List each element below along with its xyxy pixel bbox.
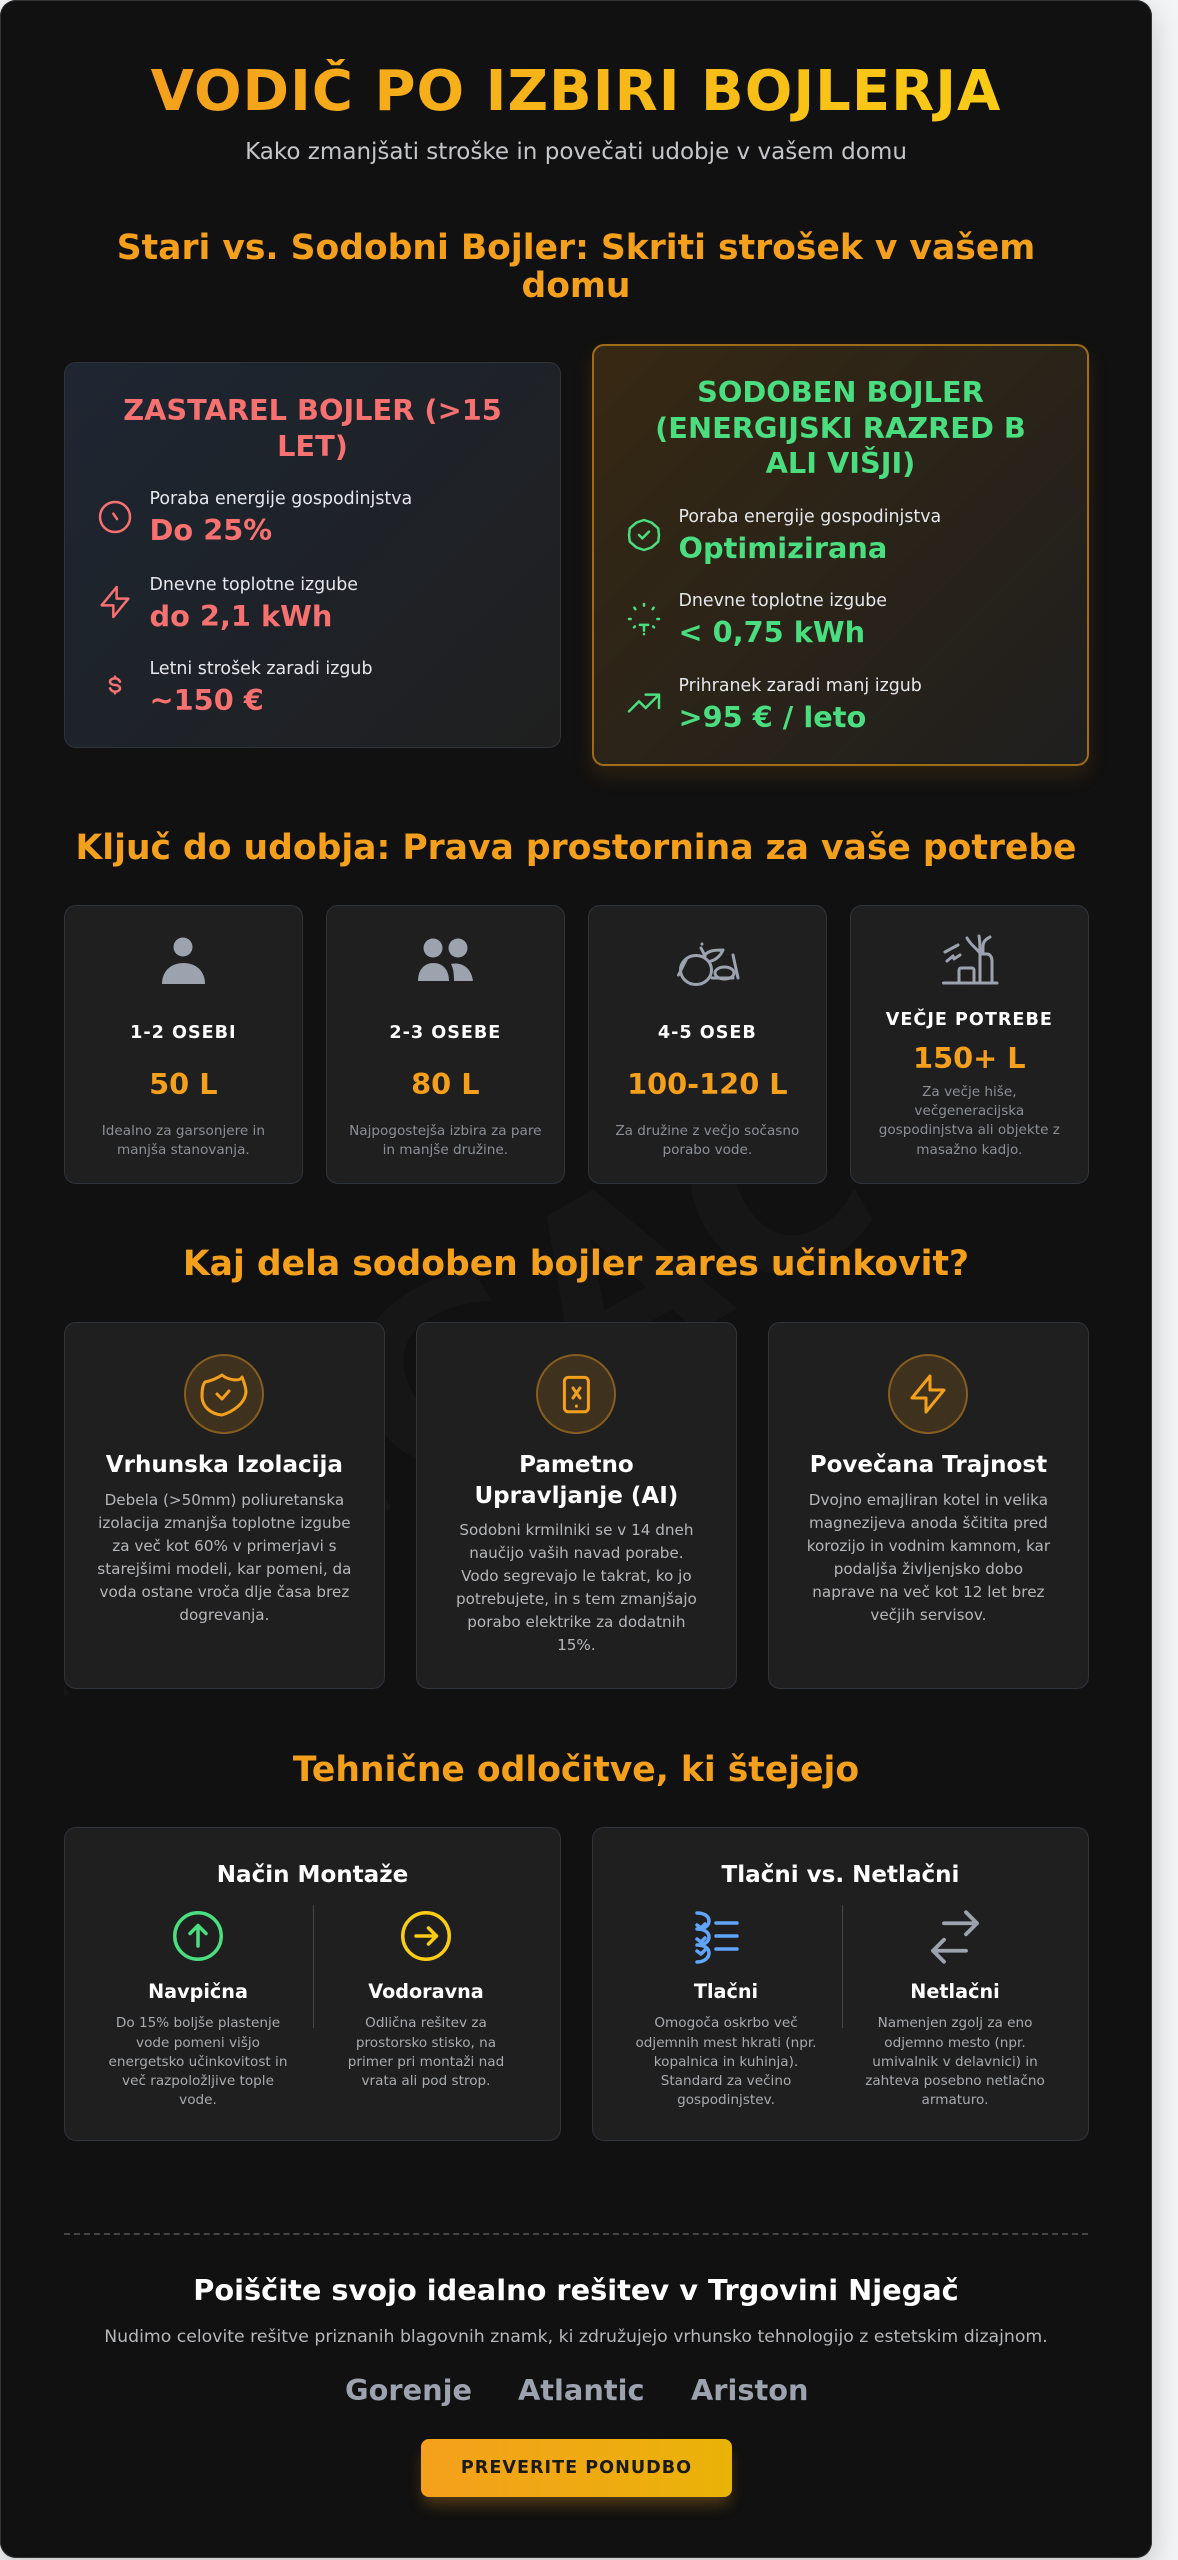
name: Netlačni — [910, 1980, 1000, 2003]
column: non-pressure — [840, 1904, 1070, 2114]
description: umivalnik v delavnici) in — [872, 2054, 1038, 2070]
description: manjša stanovanja. — [117, 1142, 250, 1158]
subtitle: Kako zmanjšati stroške in povečati udobje v vašem domu — [245, 139, 907, 165]
description — [102, 1123, 265, 1158]
label: Poraba energije gospodinjstva — [150, 489, 412, 509]
icon: two people — [418, 938, 473, 981]
description — [109, 2015, 287, 2108]
description: masažno kadjo. — [916, 1142, 1022, 1158]
label: 4-5 OSEB — [658, 1023, 757, 1043]
old boiler heading: ZASTAREL BOJLER (>15 — [123, 393, 502, 427]
heading: old vs modern — [117, 228, 1035, 306]
description: več razpoložljive tople — [122, 2073, 274, 2089]
description — [879, 1084, 1060, 1158]
icon: exchange arrows — [922, 1904, 988, 1970]
icon: trend up — [628, 693, 660, 713]
old boiler heading: LET) — [277, 429, 348, 463]
value: Optimizirana — [678, 530, 887, 564]
brand names — [0, 2372, 1152, 2408]
description: naprave na več kot 12 let brez — [812, 1582, 1045, 1600]
description: gospodinjstva ali objekte z — [879, 1122, 1060, 1138]
size card: 1-2 persons — [64, 905, 303, 1184]
label: Dnevne toplotne izgube — [678, 591, 887, 611]
label: Letni strošek zaradi izgub — [150, 659, 372, 679]
call to action text: Nudimo celovite rešitve priznanih blagovnih znamk, ki združujejo vrhunsko tehnologijo z estetskim dizajnom. — [104, 2327, 1048, 2347]
name: Vodoravna — [368, 1980, 484, 2003]
description — [456, 1520, 697, 1654]
panel: modern boiler — [592, 344, 1089, 766]
title: VODIČ PO IZBIRI BOJLERJA — [151, 59, 1001, 124]
icon badge: bolt — [888, 1354, 968, 1434]
description: energetsko učinkovitost in — [109, 2054, 287, 2070]
column: horizontal — [348, 1911, 504, 2089]
label: Prihranek zaradi manj izgub — [678, 676, 922, 696]
modern boiler heading: SODOBEN BOJLER — [697, 375, 984, 409]
heading: capacity: Ključ do udobja: Prava prostornina za vaše potrebe — [76, 828, 1076, 868]
description — [807, 1490, 1050, 1624]
icon: bolt — [910, 1374, 946, 1414]
modern boiler heading: (ENERGIJSKI RAZRED B — [655, 410, 1026, 444]
icon: arrow right circle — [401, 1911, 451, 1961]
description: gospodinjstev. — [677, 2092, 775, 2108]
metric: energy use — [98, 489, 412, 547]
icon: dollar — [108, 675, 122, 695]
description: Idealno za garsonjere in — [102, 1123, 265, 1139]
icon badge: phone — [536, 1354, 616, 1434]
description — [615, 1123, 799, 1158]
size card: 4-5 persons — [588, 905, 827, 1184]
title: Upravljanje (AI) — [474, 1483, 678, 1509]
capacity: 150+ L — [913, 1040, 1026, 1074]
column: vertical — [109, 1911, 287, 2108]
feature card: smart control — [416, 1322, 737, 1689]
icon: person — [162, 938, 205, 984]
heading: technical decisions: Tehnične odločitve, ki štejejo — [293, 1750, 859, 1790]
label: Poraba energije gospodinjstva — [678, 507, 941, 527]
label: 1-2 OSEBI — [130, 1023, 237, 1043]
description: magnezijeva anoda ščitita pred — [809, 1514, 1048, 1532]
metric: annual cost — [108, 659, 372, 717]
description: Sodobni krmilniki se v 14 dneh — [459, 1520, 693, 1538]
label: VEČJE POTREBE — [886, 1010, 1053, 1030]
icon: phone — [562, 1376, 590, 1414]
icon: arrow up circle — [173, 1911, 223, 1961]
icon: shield check — [200, 1374, 248, 1416]
metric: heat loss — [100, 574, 358, 632]
description: Vodo segrevajo le takrat, ko jo — [461, 1566, 692, 1584]
description: porabo elektrike za dodatnih — [467, 1612, 686, 1630]
description — [97, 1490, 352, 1624]
description: Dvojno emajliran kotel in velika — [809, 1490, 1048, 1508]
description: Odlična rešitev za — [365, 2015, 487, 2031]
description: armaturo. — [922, 2092, 988, 2108]
description — [349, 1123, 542, 1158]
label: Dnevne toplotne izgube — [150, 574, 358, 594]
value: < 0,75 kWh — [678, 614, 865, 648]
description: in manjše družine. — [383, 1142, 508, 1158]
capacity: 50 L — [149, 1066, 218, 1100]
description: 15%. — [557, 1636, 596, 1654]
icon: coil — [695, 1911, 739, 1964]
description: Najpogostejša izbira za pare — [349, 1123, 542, 1139]
description: starejšimi modeli, kar pomeni, da — [97, 1560, 352, 1578]
modern boiler heading — [655, 375, 1026, 480]
description: odjemnih mest hkrati (npr. — [635, 2035, 817, 2051]
name: Tlačni — [694, 1980, 758, 2003]
panel: mounting — [64, 1827, 561, 2141]
capacity: 100-120 L — [627, 1066, 788, 1100]
panel: pressure — [592, 1827, 1089, 2141]
label: 2-3 OSEBE — [389, 1023, 501, 1043]
modern boiler heading: ALI VIŠJI) — [766, 446, 915, 480]
description: Za večje hiše, — [922, 1084, 1017, 1100]
name: Navpična — [148, 1980, 248, 2003]
brand: Ariston: Ariston — [691, 2373, 809, 2407]
button: PREVERITE PONUDBO — [461, 2458, 692, 2478]
description: korozijo in vodnim kamnom, kar — [807, 1536, 1050, 1554]
value: do 2,1 kWh — [150, 598, 332, 632]
description: Omogoča oskrbo več — [654, 2015, 798, 2031]
capacity: 80 L — [411, 1066, 480, 1100]
description: dogrevanja. — [179, 1606, 269, 1624]
description — [348, 2015, 504, 2089]
value: Do 25% — [150, 513, 272, 547]
description: primer pri montaži nad — [348, 2054, 504, 2070]
description: voda ostane vroča dlje časa brez — [99, 1582, 349, 1600]
description: porabo vode. — [662, 1142, 752, 1158]
brand: Gorenje: Gorenje — [345, 2373, 472, 2407]
icon: sparkle dots — [628, 602, 660, 636]
button — [421, 2439, 732, 2497]
description: večgeneracijska — [914, 1103, 1024, 1119]
size card: 2-3 persons — [326, 905, 565, 1184]
panel title: Način Montaže — [217, 1862, 408, 1888]
title — [474, 1452, 678, 1509]
description: podaljša življenjsko dobo — [834, 1560, 1023, 1578]
column: pressure — [635, 1911, 817, 2108]
icon badge: shield — [184, 1354, 264, 1434]
panel: old boiler — [64, 362, 561, 748]
description: Za družine z večjo sočasno — [615, 1123, 799, 1139]
description: odjemno mesto (npr. — [884, 2035, 1026, 2051]
icon: bolt — [100, 586, 130, 618]
title: Pametno — [519, 1452, 634, 1478]
description: Do 15% boljše plastenje — [116, 2015, 280, 2031]
description: prostorsko stisko, na — [356, 2035, 496, 2051]
description: naučijo vaših navad porabe. — [469, 1544, 684, 1562]
description: kopalnica in kuhinja). — [654, 2054, 798, 2070]
description — [840, 2014, 1070, 2111]
feature card: insulation — [64, 1322, 385, 1689]
metric: heat loss — [628, 591, 887, 648]
old boiler heading — [123, 393, 502, 463]
feature card: durability — [768, 1322, 1089, 1689]
value: ~150 € — [150, 683, 264, 717]
value: >95 € / leto — [678, 700, 866, 734]
icon: building — [942, 934, 998, 984]
call to action heading: Poiščite svojo idealno rešitev v Trgovini Njegač — [193, 2273, 959, 2307]
description — [635, 2015, 817, 2108]
description: vode pomeni višjo — [136, 2035, 260, 2051]
metric: savings — [628, 676, 922, 734]
description: izolacija zmanjša toplotne izgube — [98, 1514, 351, 1532]
heading: effectiveness: Kaj dela sodoben bojler zares učinkovit? — [183, 1244, 969, 1284]
heading: old vs modern: Stari vs. Sodobni Bojler: Skriti strošek v vašem — [117, 228, 1035, 268]
description: Debela (>50mm) poliuretanska — [105, 1490, 344, 1508]
icon: badge check — [628, 518, 660, 552]
icon: clock — [98, 500, 132, 534]
description: potrebujete, in s tem zmanjšajo — [456, 1590, 697, 1608]
description: za več kot 60% v primerjavi s — [112, 1536, 337, 1554]
description: Standard za večino — [661, 2073, 791, 2089]
heading: old vs modern: domu — [521, 266, 631, 306]
title: Povečana Trajnost — [810, 1452, 1047, 1478]
panel title: Tlačni vs. Netlačni — [722, 1862, 959, 1888]
description: večjih servisov. — [870, 1606, 986, 1624]
description: Namenjen zgolj za eno — [878, 2015, 1032, 2031]
size card: larger needs — [850, 905, 1089, 1184]
title: Vrhunska Izolacija — [106, 1452, 343, 1478]
metric: energy use — [628, 507, 941, 564]
description: zahteva posebno netlačno — [865, 2073, 1045, 2089]
description: vode. — [179, 2092, 217, 2108]
description: vrata ali pod strop. — [361, 2073, 490, 2089]
brand: Atlantic: Atlantic — [518, 2373, 645, 2407]
icon: family — [676, 942, 740, 986]
